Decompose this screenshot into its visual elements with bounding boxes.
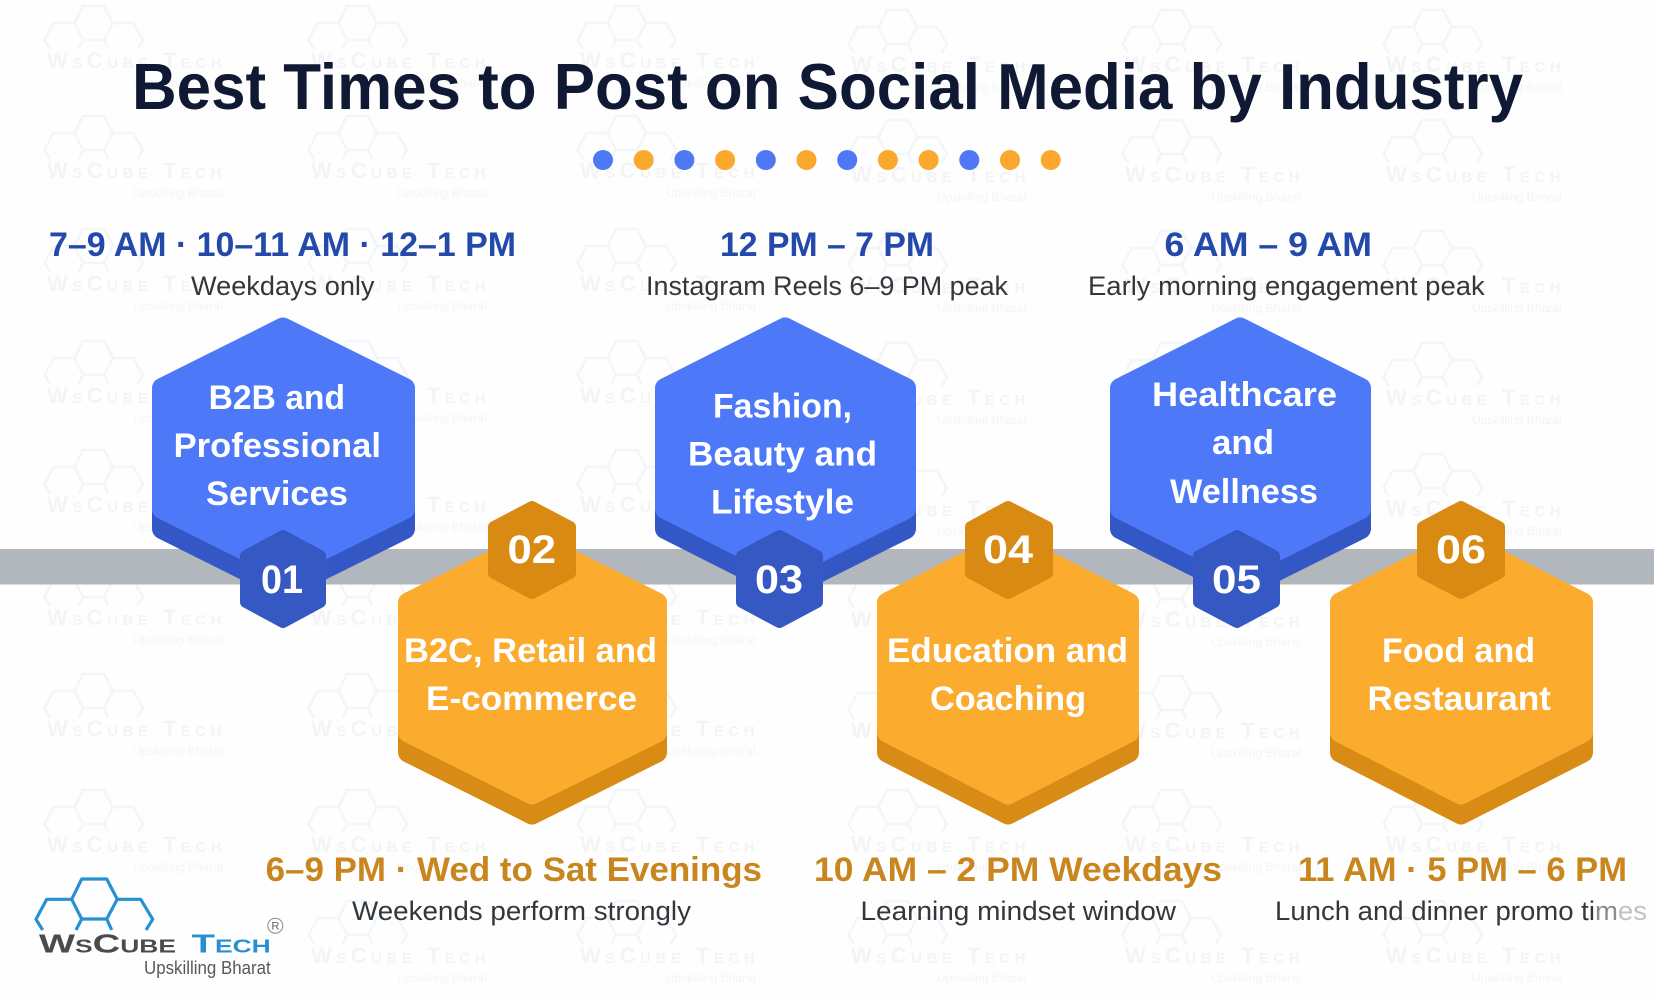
text block: 05 posting times: 6 AM – 9 AM: [1164, 226, 1372, 264]
background watermark pattern: WsCube Tech: [311, 383, 490, 408]
background watermark pattern: WsCube Tech: [47, 158, 226, 183]
registered mark: [268, 918, 283, 933]
background watermark pattern: WsCube Tech: [851, 162, 1030, 187]
panel: 03 Fashion, Beauty and Lifestyle: [665, 328, 906, 590]
hexagon: 02: [408, 540, 657, 814]
text block: 06 posting times: [1275, 851, 1647, 926]
panel: 06 Food and Restaurant: [1340, 540, 1583, 814]
label: 03: Beauty and: [688, 436, 877, 474]
background watermark pattern: Upskilling Bharat: [937, 524, 1028, 538]
background watermark pattern: WsCube Tech: [47, 492, 226, 517]
background watermark pattern: WsCube Tech: [1125, 943, 1304, 968]
panel: 04 Education and Coaching: [887, 540, 1129, 814]
background watermark pattern: WsCube Tech: [580, 48, 759, 73]
background watermark pattern: WsCube Tech: [47, 605, 226, 630]
hexagon: 06: [1340, 540, 1583, 814]
logo wordmark: Tech: Tech: [192, 929, 271, 959]
background watermark pattern: Upskilling Bharat: [1472, 301, 1563, 315]
background watermark pattern: Upskilling Bharat: [397, 520, 488, 534]
badge: 04: [971, 507, 1047, 593]
label: 01: Services: [206, 475, 348, 513]
background watermark pattern: WsCube Tech: [311, 158, 490, 183]
text block: 05 posting times: Early morning engagement peak: [1088, 271, 1485, 301]
background watermark pattern: Upskilling Bharat: [937, 80, 1028, 94]
background watermark pattern: WsCube Tech: [1386, 52, 1565, 77]
background watermark pattern: WsCube Tech: [1386, 943, 1565, 968]
text block: 02 posting times: 6–9 PM · Wed to Sat Evenings: [266, 851, 762, 889]
text block: 04 posting times: 10 AM – 2 PM Weekdays: [814, 851, 1222, 889]
hexagon: 05: [1120, 328, 1361, 590]
background watermark pattern: WsCube Tech: [311, 605, 490, 630]
background watermark pattern: Upskilling Bharat: [1211, 413, 1302, 427]
background watermark pattern: Upskilling Bharat: [666, 411, 757, 425]
background watermark pattern: Upskilling Bharat: [133, 299, 224, 313]
background watermark pattern: WsCube Tech: [47, 383, 226, 408]
badge: 01: 01: [261, 558, 303, 602]
background watermark pattern: Upskilling Bharat: [937, 746, 1028, 760]
background watermark pattern: WsCube Tech: [580, 716, 759, 741]
background watermark pattern: Upskilling Bharat: [1472, 413, 1563, 427]
background watermark pattern: Upskilling Bharat: [133, 411, 224, 425]
background watermark pattern: WsCube Tech: [1386, 832, 1565, 857]
label: 05: Wellness: [1170, 473, 1318, 511]
background watermark pattern: WsCube Tech: [851, 273, 1030, 298]
background watermark pattern: WsCube Tech: [1386, 162, 1565, 187]
background watermark pattern: WsCube Tech: [47, 832, 226, 857]
background watermark pattern: WsCube Tech: [851, 496, 1030, 521]
logo wordmark: WsCube: WsCube: [39, 929, 176, 959]
hexagon: 04: [887, 540, 1129, 814]
background watermark pattern: Upskilling Bharat: [1211, 746, 1302, 760]
background watermark pattern: WsCube Tech: [1386, 273, 1565, 298]
background watermark pattern: Upskilling Bharat: [666, 76, 757, 90]
icon: logo hexagons: [36, 879, 153, 930]
badge: 05: [1199, 536, 1274, 622]
background watermark pattern: Upskilling Bharat: [937, 635, 1028, 649]
label: 02: E-commerce: [426, 680, 637, 718]
background watermark pattern: Upskilling Bharat: [397, 411, 488, 425]
background watermark pattern: Upskilling Bharat: [937, 971, 1028, 985]
background watermark pattern: WsCube Tech: [311, 48, 490, 73]
text block: 02 posting times: Weekends perform strongly: [352, 896, 692, 926]
background watermark pattern: Upskilling Bharat: [1211, 190, 1302, 204]
background watermark pattern: Upskilling Bharat: [133, 186, 224, 200]
badge: 06: 06: [1436, 528, 1486, 572]
background watermark pattern: Upskilling Bharat: [666, 633, 757, 647]
background watermark pattern: WsCube Tech: [580, 943, 759, 968]
background watermark pattern: Upskilling Bharat: [1211, 860, 1302, 874]
label: 05: [1152, 376, 1337, 511]
background watermark pattern: WsCube Tech: [851, 943, 1030, 968]
background watermark pattern: WsCube Tech: [1386, 385, 1565, 410]
background watermark pattern: WsCube Tech: [580, 158, 759, 183]
background watermark pattern: Upskilling Bharat: [1211, 524, 1302, 538]
background watermark pattern: WsCube Tech: [580, 271, 759, 296]
background watermark pattern: Upskilling Bharat: [397, 971, 488, 985]
background watermark pattern: WsCube Tech: [851, 832, 1030, 857]
label: 01: B2B and: [209, 379, 345, 417]
background watermark pattern: WsCube Tech: [47, 716, 226, 741]
background watermark pattern: Upskilling Bharat: [1472, 971, 1563, 985]
background watermark pattern: WsCube Tech: [1125, 385, 1304, 410]
background watermark pattern: WsCube Tech: [1125, 607, 1304, 632]
text block: 03 posting times: 12 PM – 7 PM: [720, 226, 934, 264]
background watermark pattern: WsCube Tech: [851, 52, 1030, 77]
background watermark pattern: Upskilling Bharat: [397, 633, 488, 647]
logo tagline: Upskilling Bharat: [144, 958, 271, 978]
background watermark pattern: WsCube Tech: [1125, 52, 1304, 77]
background watermark pattern: Upskilling Bharat: [397, 76, 488, 90]
text block: 06 posting times: Lunch and dinner promo times: [1275, 896, 1647, 926]
background watermark pattern: Upskilling Bharat: [666, 520, 757, 534]
text block: 01 posting times: Weekdays only: [191, 271, 375, 301]
background watermark pattern: WsCube Tech: [47, 271, 226, 296]
panel: 05 Healthcare and Wellness: [1120, 328, 1361, 590]
background watermark pattern: Upskilling Bharat: [1472, 524, 1563, 538]
title: Best Times to Post on Social Media by Industry: [132, 50, 1523, 123]
background watermark pattern: Upskilling Bharat: [1472, 80, 1563, 94]
background watermark pattern: WsCube Tech: [580, 832, 759, 857]
background watermark pattern: Upskilling Bharat: [666, 971, 757, 985]
background watermark pattern: WsCube Tech: [311, 492, 490, 517]
background watermark pattern: Upskilling Bharat: [133, 633, 224, 647]
label: 03: [688, 388, 877, 522]
text block: 06 posting times: 11 AM · 5 PM – 6 PM: [1298, 851, 1627, 889]
label: 05: and: [1212, 424, 1274, 462]
background watermark pattern: Upskilling Bharat: [133, 76, 224, 90]
badge: 02: [494, 507, 570, 593]
background watermark pattern: Upskilling Bharat: [1472, 746, 1563, 760]
label: 06: Restaurant: [1368, 680, 1551, 718]
background watermark pattern: WsCube Tech: [851, 385, 1030, 410]
background watermark pattern: WsCube Tech: [311, 716, 490, 741]
background watermark pattern: WsCube Tech: [580, 383, 759, 408]
background watermark pattern: WsCube Tech: [311, 271, 490, 296]
background watermark pattern: Upskilling Bharat: [133, 744, 224, 758]
text block: 01 posting times: [49, 226, 516, 301]
label: 04: [887, 632, 1128, 718]
background watermark pattern: WsCube Tech: [1125, 832, 1304, 857]
logo: WsCube Tech: [36, 879, 283, 978]
label: 02: [404, 632, 657, 718]
hexagon: 03: [665, 328, 906, 590]
background watermark pattern: WsCube Tech: [580, 492, 759, 517]
label: 04: Coaching: [930, 680, 1086, 718]
hexagon: 01: [162, 328, 405, 590]
background watermark pattern: WsCube Tech: [47, 48, 226, 73]
badge: 05: 05: [1212, 558, 1261, 602]
text block: 03 posting times: [646, 226, 1008, 301]
background watermark pattern: Upskilling Bharat: [397, 186, 488, 200]
background watermark pattern: Upskilling Bharat: [397, 744, 488, 758]
background watermark pattern: Upskilling Bharat: [1472, 860, 1563, 874]
text block: 02 posting times: [266, 851, 762, 926]
background watermark pattern: Upskilling Bharat: [937, 301, 1028, 315]
background watermark pattern: Upskilling Bharat: [666, 299, 757, 313]
background watermark pattern: Upskilling Bharat: [397, 860, 488, 874]
background watermark pattern: WsCube Tech: [1386, 607, 1565, 632]
background watermark pattern: WsCube Tech: [311, 943, 490, 968]
background watermark pattern: WsCube Tech: [311, 832, 490, 857]
label: 01: Professional: [174, 427, 381, 465]
background watermark pattern: Upskilling Bharat: [1211, 301, 1302, 315]
badge: 02: 02: [508, 528, 556, 572]
panel: 01 B2B and Professional Services: [162, 328, 405, 590]
badge: 03: [742, 536, 817, 622]
background watermark pattern: Upskilling Bharat: [1211, 80, 1302, 94]
badge: 04: 04: [983, 528, 1034, 572]
background watermark pattern: WsCube Tech: [1386, 496, 1565, 521]
label: 03: Lifestyle: [711, 484, 854, 522]
background watermark pattern: Upskilling Bharat: [666, 744, 757, 758]
background watermark pattern: Upskilling Bharat: [133, 860, 224, 874]
background watermark pattern: WsCube Tech: [1125, 496, 1304, 521]
background watermark pattern: WsCube Tech: [580, 605, 759, 630]
background watermark pattern: WsCube Tech: [851, 718, 1030, 743]
label: 06: Food and: [1382, 632, 1535, 670]
background watermark pattern: WsCube Tech: [1386, 718, 1565, 743]
background watermark pattern: WsCube Tech: [1125, 273, 1304, 298]
badge: 03: 03: [755, 558, 803, 602]
background watermark pattern: Upskilling Bharat: [937, 860, 1028, 874]
dot row divider: [593, 150, 1061, 170]
background watermark pattern: Upskilling Bharat: [937, 413, 1028, 427]
background watermark pattern: WsCube Tech: [851, 607, 1030, 632]
label: 03: Fashion,: [713, 388, 852, 426]
background watermark pattern: Upskilling Bharat: [1472, 190, 1563, 204]
registered mark: R: [271, 921, 279, 933]
badge: 01: [246, 536, 320, 622]
label: 06: [1368, 632, 1551, 718]
background watermark pattern: WsCube Tech: [1125, 162, 1304, 187]
background watermark pattern: Upskilling Bharat: [133, 520, 224, 534]
background watermark pattern: Upskilling Bharat: [666, 860, 757, 874]
text block: 04 posting times: Learning mindset window: [860, 896, 1177, 926]
label: 04: Education and: [887, 632, 1128, 670]
background watermark pattern: Upskilling Bharat: [1211, 971, 1302, 985]
text block: 01 posting times: 7–9 AM · 10–11 AM · 12–1 PM: [49, 226, 516, 264]
text block: 04 posting times: [814, 851, 1222, 926]
label: 02: B2C, Retail and: [404, 632, 657, 670]
label: 05: Healthcare: [1152, 376, 1337, 414]
background watermark pattern: Upskilling Bharat: [666, 186, 757, 200]
background watermark pattern: Upskilling Bharat: [1472, 635, 1563, 649]
timeline band: [0, 549, 1654, 584]
text block: 03 posting times: Instagram Reels 6–9 PM peak: [646, 271, 1008, 301]
background watermark pattern: Upskilling Bharat: [1211, 635, 1302, 649]
label: 01: [174, 379, 381, 513]
panel: 02 B2C, Retail and E-commerce: [404, 540, 657, 814]
text block: 05 posting times: [1088, 226, 1485, 301]
background watermark pattern: Upskilling Bharat: [937, 190, 1028, 204]
badge: 06: [1423, 507, 1499, 593]
background watermark pattern: Upskilling Bharat: [397, 299, 488, 313]
background watermark pattern: WsCube Tech: [1125, 718, 1304, 743]
